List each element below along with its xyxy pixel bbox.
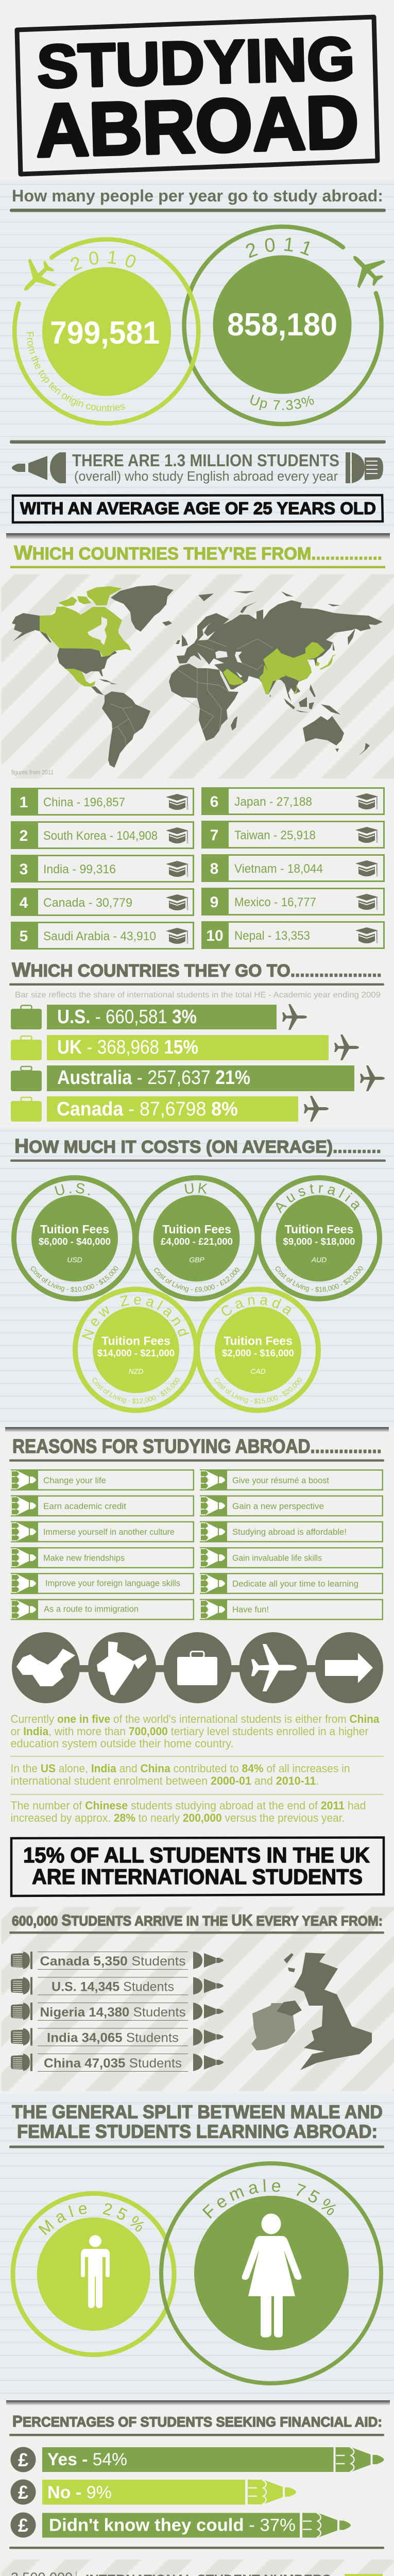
cost circle: Canada — [197, 1287, 321, 1413]
reason 2 — [11, 1495, 194, 1516]
pencil row: Nigeria: Nigeria 14,380 Students — [40, 2005, 185, 2020]
cost circle: UK: £4,000 - £21,000 — [161, 1236, 233, 1247]
reason 11: Dedicate all your time to learning — [232, 1580, 358, 1589]
rank 6: 6 — [210, 793, 218, 810]
pencil banner — [12, 451, 383, 484]
text block: one in five — [10, 1713, 380, 1750]
reason 1 — [11, 1469, 194, 1490]
bar: UK: UK - 368,968 15% — [57, 1037, 198, 1058]
cost circle: U.S. — [11, 1175, 136, 1301]
cost circle: New Zealand: New Zealand — [82, 1295, 190, 1340]
rank 8 — [201, 854, 384, 882]
cost circle: Canada: CAD — [250, 1367, 266, 1376]
bar chart note: Bar size reflects the share of international students in the total HE - Academic year ending 2009 — [15, 991, 381, 999]
icon: India — [88, 1632, 156, 1703]
reason 8 — [200, 1495, 383, 1516]
rank 5 — [11, 922, 194, 950]
pencil: yes: £ — [18, 2449, 28, 2470]
pencil row: China — [11, 2054, 224, 2072]
bar: U.S. — [11, 1004, 307, 1030]
circle: 2011 figure — [182, 225, 386, 427]
cost circle: U.S.: $6,000 - $40,000 — [39, 1236, 111, 1247]
paper shadow — [6, 533, 390, 539]
cost circle: Canada: Tuition Fees — [224, 1334, 293, 1348]
reason 9: Studying abroad is affordable! — [232, 1528, 347, 1537]
icon: arrow — [315, 1632, 383, 1703]
rank 2 — [11, 821, 194, 849]
pencil banner: THERE ARE 1.3 MILLION STUDENTS — [72, 451, 339, 470]
rank 1 — [11, 788, 194, 816]
pencil: yes — [10, 2447, 384, 2472]
title line 1: STUDYING — [36, 25, 355, 101]
bar: Canada — [11, 1096, 329, 1122]
reason 12: Have fun! — [232, 1605, 269, 1615]
pencil: yes: Yes - 54% — [47, 2450, 127, 2469]
circle: 2010 figure: 799,581 — [50, 315, 160, 351]
cost circle: New Zealand: Tuition Fees — [101, 1334, 170, 1348]
reason 12 — [200, 1599, 383, 1620]
title line 2: ABROAD — [35, 80, 360, 173]
rank 6: Japan - 27,188 — [234, 795, 312, 809]
cost circle: Australia: AUD — [311, 1256, 327, 1264]
average age stamp — [13, 495, 383, 522]
circle: 2010 figure — [12, 237, 201, 426]
reason 4: Make new friendships — [43, 1554, 125, 1563]
highlighted origin countries — [40, 586, 336, 694]
circle: 2011 figure: Up 7.33% — [250, 395, 314, 410]
icon: man — [81, 2235, 110, 2308]
cost circle: New Zealand: NZD — [129, 1367, 143, 1376]
cost circle: Canada: Canada — [221, 1297, 291, 1316]
heading: how much it costs: HOW MUCH IT COSTS (ON AVERAGE).......... — [14, 1136, 381, 1157]
heading: gender split: THE GENERAL SPLIT BETWEEN MALE AND — [12, 2101, 383, 2123]
rank 5: Saudi Arabia - 43,910 — [43, 929, 156, 943]
panel: gender split: FEMALE STUDENTS LEARNING ABROAD: — [17, 2121, 378, 2142]
reason 11 — [200, 1573, 383, 1594]
bar: U.S.: U.S. - 660,581 3% — [57, 1006, 197, 1028]
map: UK and Ireland — [251, 1953, 372, 2070]
rank 9: 9 — [210, 894, 218, 911]
text block: one in five: or India, with more than 700,000 tertiary level students enrolled in a higher — [10, 1725, 369, 1738]
rank 8: 8 — [210, 860, 218, 877]
pencil row: U.S.: U.S. 14,345 Students — [52, 1979, 174, 1994]
pencil: didn't know: Didn't know they could - 37% — [49, 2515, 296, 2535]
pencil row: Canada: Canada 5,350 Students — [40, 1954, 185, 1969]
reason 4 — [11, 1547, 194, 1568]
cost circle: UK: GBP — [189, 1256, 204, 1264]
cost circle: UK: UK — [184, 1183, 207, 1194]
reason 10 — [200, 1547, 383, 1568]
pencil: didn't know — [10, 2512, 351, 2538]
cost circle: U.S.: Tuition Fees — [40, 1223, 109, 1236]
destination bars — [11, 1004, 385, 1122]
pencil: no: £ — [18, 2482, 28, 2503]
cost circle: U.S.: USD — [67, 1256, 82, 1264]
pencil banner: (overall) who study English abroad every year — [74, 468, 338, 484]
cost circle: New Zealand: Cost of Living - $12,000 - $15,000 — [93, 1378, 180, 1404]
cost circle: Australia: $9,000 - $18,000 — [283, 1236, 355, 1247]
circle: male — [10, 2191, 176, 2357]
heading: 600,000 students: 600,000 STUDENTS ARRIVE IN THE UK EVERY YEAR FROM: — [12, 1911, 383, 1929]
cost circle: U.S.: U.S. — [55, 1183, 90, 1195]
reason 3 — [11, 1521, 194, 1543]
reason 6: As a route to immigration — [44, 1604, 139, 1614]
circle: 2011 figure: 2011 — [246, 238, 310, 258]
rank 5: 5 — [20, 928, 28, 945]
bar: Canada: Canada - 87,6798 8% — [57, 1098, 238, 1120]
map note: figures from 2011 — [11, 769, 54, 776]
Hudson Bay — [88, 617, 107, 645]
circle: female — [159, 2161, 383, 2385]
reason 6 — [11, 1599, 194, 1620]
rank 1: 1 — [20, 794, 28, 811]
reason 8: Gain a new perspective — [232, 1502, 324, 1511]
rank 4: Canada - 30,779 — [43, 896, 132, 910]
rank 8: Vietnam - 18,044 — [234, 862, 323, 876]
heading: financial aid: PERCENTAGES OF STUDENTS SEEKING FINANCIAL AID: — [12, 2412, 382, 2430]
rank 9: Mexico - 16,777 — [234, 895, 316, 909]
heading: which countries they're from: WHICH COUNTRIES THEY'RE FROM............... — [14, 542, 382, 564]
panel: people per year — [0, 184, 394, 526]
cost circle: U.S.: Cost of Living - $10,000 - $15,000 — [31, 1266, 118, 1292]
rank 9 — [201, 888, 384, 916]
reason 5: Improve your foreign language skills — [45, 1579, 180, 1588]
pencil: didn't know: £ — [18, 2515, 28, 2536]
rank 2: South Korea - 104,908 — [43, 829, 158, 843]
cost circle: New Zealand: $14,000 - $21,000 — [97, 1348, 175, 1358]
pencil row: India: India 34,065 Students — [47, 2031, 179, 2045]
text block: Chinese students — [10, 1799, 366, 1824]
inland seas — [198, 622, 243, 677]
bar: Australia — [11, 1065, 385, 1091]
rank 10: 10 — [206, 927, 224, 944]
reason 2: Earn academic credit — [43, 1502, 126, 1511]
rank 10 — [201, 921, 384, 949]
reason 1: Change your life — [43, 1476, 106, 1485]
rank 6 — [201, 787, 384, 815]
text block: US increases — [10, 1762, 350, 1787]
pencil: no: No - 9% — [47, 2483, 112, 2502]
UK stamp: 15% OF ALL STUDENTS IN THE UK — [23, 1843, 370, 1867]
text block: US increases: international student enrolment between 2000-01 and 2010-11. — [10, 1774, 319, 1787]
reason 5 — [11, 1573, 194, 1594]
circle: female: Female 75% — [202, 2179, 336, 2218]
icon: plane — [239, 1632, 307, 1703]
panel: UK arrivals — [2, 1907, 394, 2091]
rank 2: 2 — [20, 827, 28, 844]
reason 10: Gain invaluable life skills — [232, 1554, 322, 1563]
icon: China — [12, 1632, 80, 1703]
cost circle: Australia: Tuition Fees — [285, 1223, 353, 1236]
pencil: no — [10, 2479, 296, 2505]
heading: how many people: How many people per year go to study abroad: — [12, 187, 383, 205]
ranking table — [11, 787, 384, 950]
text block: Chinese students: increased by approx. 28% to nearly 200,000 versus the previous year. — [10, 1811, 345, 1824]
UK stamp: ARE INTERNATIONAL STUDENTS — [32, 1865, 363, 1889]
cost circle: UK: Tuition Fees — [162, 1223, 231, 1236]
cost circle: New Zealand — [73, 1287, 197, 1413]
text block: US increases: In the US alone, India and China contributed to 84% of all increases in — [10, 1762, 350, 1775]
circle: male: Male 25% — [38, 2203, 144, 2235]
reasons list — [11, 1469, 383, 1620]
circle: 2010 figure: From the top ten origin countries — [27, 332, 125, 412]
rank 7 — [201, 821, 384, 849]
rank 4: 4 — [20, 894, 28, 911]
rank 10: Nepal - 13,353 — [234, 929, 310, 943]
pencil row: Canada — [11, 1952, 224, 1970]
rank 3 — [11, 855, 194, 883]
heading: which countries they go to: WHICH COUNTRIES THEY GO TO................... — [12, 959, 382, 981]
reason 9 — [200, 1521, 383, 1543]
rank 3: India - 99,316 — [43, 862, 116, 876]
cost circle: Australia — [258, 1175, 382, 1301]
circle: 2010 figure: 2010 — [71, 251, 136, 271]
icon: suitcase — [164, 1632, 232, 1703]
cost circle: Canada: Cost of Living - $15,000 - $20,000 — [214, 1378, 302, 1404]
rank 1: China - 196,857 — [43, 795, 125, 809]
text block: Chinese students: The number of Chinese students studying abroad at the end of 2011 had — [10, 1799, 366, 1812]
reason 7: Give your résumé a boost — [232, 1476, 329, 1485]
rank 7: Taiwan - 25,918 — [234, 828, 316, 842]
reason 7 — [200, 1469, 383, 1490]
text block: one in five: education system outside their home country. — [10, 1737, 234, 1750]
circle: 2011 figure: 858,180 — [227, 307, 337, 343]
panel: world map — [2, 574, 394, 778]
panel: international student numbers — [2, 2560, 394, 2576]
average age stamp: WITH AN AVERAGE AGE OF 25 YEARS OLD — [20, 499, 376, 518]
rank 3: 3 — [20, 861, 28, 878]
cost circle: Australia: Australia — [276, 1184, 359, 1214]
financial aid pencils — [10, 2447, 384, 2538]
pencil row: Nigeria — [11, 2003, 224, 2021]
cost circle: Australia: Cost of Living - $18,000 - $20,000 — [276, 1266, 363, 1292]
bar: Australia: Australia - 257,637 21% — [57, 1067, 250, 1089]
paper shadow — [5, 1427, 389, 1432]
reason 3: Immerse yourself in another culture — [43, 1528, 175, 1537]
rank 7: 7 — [210, 827, 218, 844]
bar chart — [11, 2570, 383, 2576]
pencil row: U.S. — [11, 1977, 224, 1995]
UK stamp — [11, 1837, 384, 1896]
title stamp — [17, 17, 378, 174]
cost circle: UK — [135, 1175, 258, 1301]
paper shadow — [6, 2400, 390, 2405]
cost circle: UK: Cost of Living - £9,000 - £12,000 — [155, 1267, 239, 1293]
icon: woman — [242, 2213, 301, 2337]
bar: UK — [11, 1035, 359, 1060]
panel: costs — [0, 1130, 394, 1422]
rank 4 — [11, 888, 194, 916]
pencil row: China: China 47,035 Students — [44, 2056, 182, 2071]
country borders — [110, 639, 273, 745]
cost circle: Canada: $2,000 - $16,000 — [222, 1348, 294, 1358]
world map — [12, 585, 383, 768]
pencil row: India — [11, 2028, 224, 2046]
panel: gender split — [0, 2101, 394, 2394]
text block: one in five: Currently one in five of the world's international students is either from China — [10, 1713, 380, 1725]
icon chain — [12, 1632, 383, 1703]
